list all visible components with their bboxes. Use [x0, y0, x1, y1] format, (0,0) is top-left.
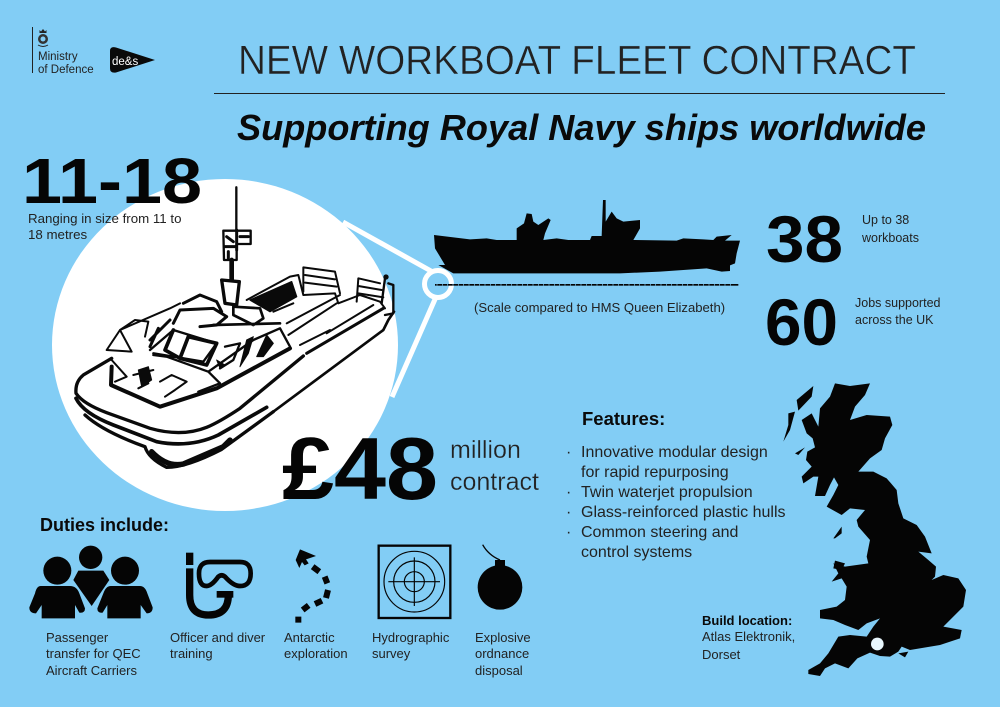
icon: target [379, 546, 450, 618]
logo: de&s: de&s [112, 56, 138, 68]
icon: dotted arrow [296, 549, 328, 623]
build location: Build location: [702, 613, 792, 628]
duty: diver training [170, 553, 266, 661]
stat: 38 workboats: 38 [766, 202, 843, 276]
duty: hydrographic survey: survey [372, 646, 411, 661]
features list: control systems [581, 544, 692, 561]
features list: Twin waterjet propulsion [581, 484, 753, 501]
illustration: HMS Queen Elizabeth silhouette [434, 200, 740, 286]
duty: Antarctic exploration [284, 549, 348, 661]
build location [702, 613, 795, 662]
stat: size range: 11-18 [22, 145, 202, 217]
duty: passengers: transfer for QEC [46, 646, 141, 661]
stat: contract value [282, 419, 539, 518]
duty: ordnance disposal: disposal [475, 663, 523, 678]
icon: snorkel and mask [186, 553, 251, 615]
stat: size range: 18 metres [28, 227, 87, 242]
duty: passengers [29, 546, 153, 678]
stat: size range [22, 145, 202, 242]
stat: size range: Ranging in size from 11 to [28, 211, 182, 226]
duty: ordnance disposal: ordnance [475, 646, 529, 661]
logo: de&s [110, 47, 155, 73]
duty: Antarctic exploration: Antarctic [284, 630, 335, 645]
features list: Glass-reinforced plastic hulls [581, 504, 786, 521]
stat: contract value: £48 [282, 419, 438, 518]
duty: passengers: Aircraft Carriers [46, 663, 138, 678]
build location: Atlas Elektronik, [702, 629, 795, 644]
stat: 60 jobs: across the UK [855, 313, 934, 327]
stat: 60 jobs [765, 285, 941, 359]
logo: Ministry of Defence: of Defence [38, 64, 94, 76]
illustration: workboat [76, 187, 394, 467]
features list: Innovative modular design [581, 444, 768, 461]
icon: three people [29, 546, 153, 618]
features list: Features: [582, 408, 665, 429]
magnifier circle with connector lines [52, 179, 452, 511]
duty: diver training: Officer and diver [170, 630, 266, 645]
duty: ordnance disposal [475, 545, 531, 678]
duty: hydrographic survey: Hydrographic [372, 630, 450, 645]
subtitle: Supporting Royal Navy ships worldwide [237, 107, 926, 148]
duty: Antarctic exploration: exploration [284, 646, 348, 661]
duty: diver training: training [170, 646, 213, 661]
icon: bomb [478, 545, 522, 610]
features list: Common steering and [581, 524, 738, 541]
stat: 38 workboats [766, 202, 919, 276]
features list: · [566, 524, 571, 541]
features list: · [566, 504, 571, 521]
features list: for rapid repurposing [581, 464, 729, 481]
title: NEW WORKBOAT FLEET CONTRACT [238, 37, 916, 83]
stat: 60 jobs: 60 [765, 285, 838, 359]
stat: 38 workboats: workboats [861, 231, 919, 245]
duty: hydrographic survey [372, 546, 450, 661]
stat: contract value: million [450, 436, 521, 464]
features list: · [566, 444, 571, 461]
map: United Kingdom [783, 383, 966, 676]
stat: 60 jobs: Jobs supported [855, 296, 941, 310]
caption: scale: (Scale compared to HMS Queen Elizabeth) [474, 300, 725, 315]
features list: · [566, 484, 571, 501]
duty: ordnance disposal: Explosive [475, 630, 531, 645]
stat: 38 workboats: Up to 38 [862, 213, 909, 227]
duty: passengers: Passenger [46, 630, 109, 645]
stat: contract value: contract [450, 468, 539, 496]
logo: Ministry of Defence [32, 27, 94, 76]
features list [566, 408, 786, 561]
heading: duties: Duties include: [40, 515, 169, 535]
build location: Dorset [702, 647, 741, 662]
logo: Ministry of Defence: Ministry [38, 51, 78, 63]
